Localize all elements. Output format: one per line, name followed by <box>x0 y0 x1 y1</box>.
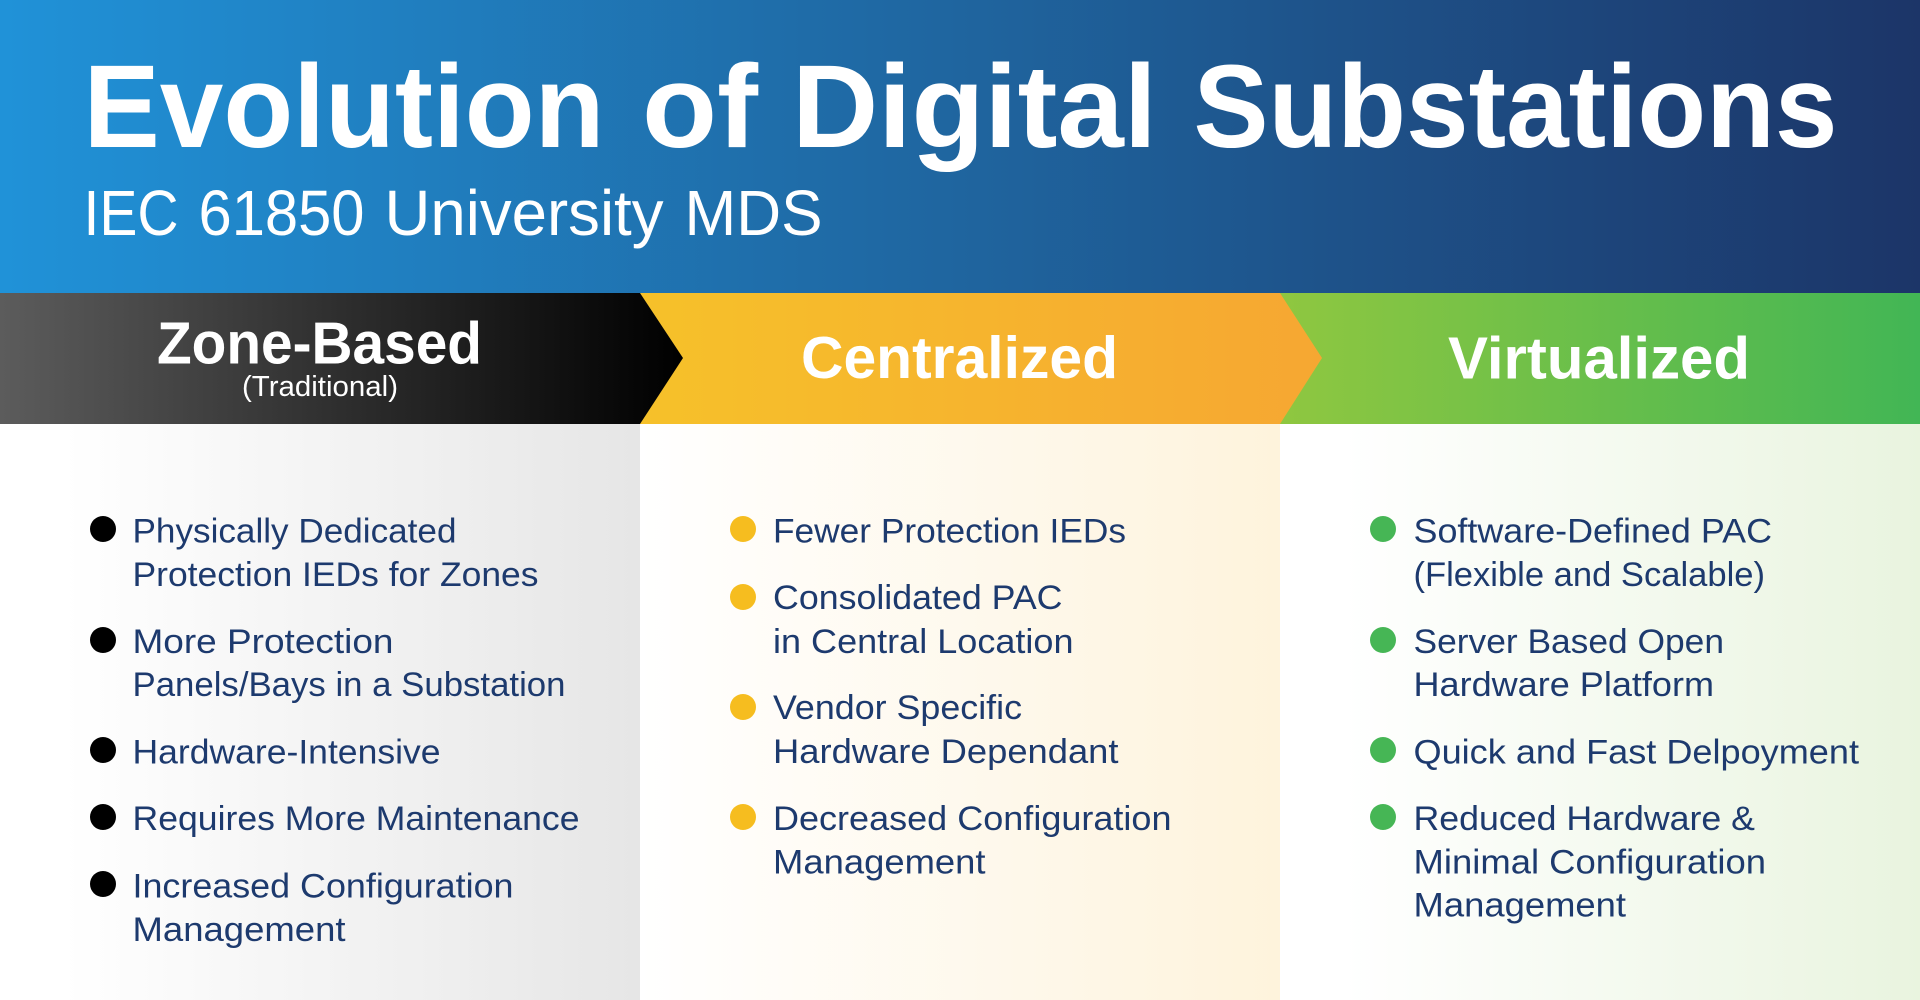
panel: zone-based <box>0 293 683 1000</box>
band: virtualized <box>1280 293 1920 424</box>
title: of <box>642 41 759 173</box>
list: zone-based features: Requires More Maintenance <box>132 800 580 838</box>
list: virtualized features: Hardware Platform <box>1414 666 1714 704</box>
list: zone-based features: Hardware-Intensive <box>132 734 440 772</box>
list: zone-based features: Management <box>132 911 346 949</box>
list: zone-based features: Increased Configuration <box>132 868 514 906</box>
list: zone-based features: More Protection <box>132 623 394 661</box>
list: centralized features: Decreased Configuration <box>773 800 1172 838</box>
list: centralized features: Management <box>773 844 986 882</box>
title: Digital <box>792 41 1157 173</box>
list: centralized features <box>730 512 1172 882</box>
list: centralized features: Vendor Specific <box>773 689 1022 727</box>
band: virtualized: Virtualized <box>1448 326 1750 392</box>
list: virtualized features: Server Based Open <box>1414 623 1724 661</box>
list: zone-based features <box>90 512 580 949</box>
band: zone-based arrow: (Traditional) <box>242 371 398 403</box>
subtitle: University <box>384 177 664 249</box>
list: centralized features: Hardware Dependant <box>773 733 1119 771</box>
subtitle: MDS <box>684 177 822 249</box>
panel: centralized <box>640 293 1322 1000</box>
list: virtualized features <box>1370 512 1859 924</box>
list: virtualized features: Management <box>1414 886 1626 924</box>
band: centralized arrow <box>640 293 1322 424</box>
panel: virtualized <box>1280 293 1920 1000</box>
list: centralized features: Consolidated PAC <box>773 579 1062 617</box>
title <box>84 41 1838 173</box>
list: zone-based features: Panels/Bays in a Substation <box>132 666 566 704</box>
title: Substations <box>1194 41 1838 173</box>
band: zone-based arrow <box>0 293 683 424</box>
list: virtualized features: Reduced Hardware & <box>1414 800 1755 838</box>
list: virtualized features: (Flexible and Scalable) <box>1414 556 1765 594</box>
title: Evolution <box>84 41 604 173</box>
subtitle <box>84 177 822 249</box>
subtitle: 61850 <box>198 177 364 249</box>
header banner <box>0 0 1920 293</box>
subtitle: IEC <box>84 177 178 249</box>
list: zone-based features: Physically Dedicated <box>132 512 456 550</box>
list: centralized features: in Central Location <box>773 623 1074 661</box>
band: zone-based arrow: Zone-Based <box>157 310 482 376</box>
list: zone-based features: Protection IEDs for Zones <box>132 556 538 594</box>
band: centralized arrow: Centralized <box>801 325 1118 391</box>
list: virtualized features: Minimal Configuration <box>1414 844 1766 882</box>
list: virtualized features: Quick and Fast Delpoyment <box>1414 734 1859 772</box>
list: centralized features: Fewer Protection IEDs <box>773 512 1126 550</box>
list: virtualized features: Software-Defined PAC <box>1414 512 1772 550</box>
